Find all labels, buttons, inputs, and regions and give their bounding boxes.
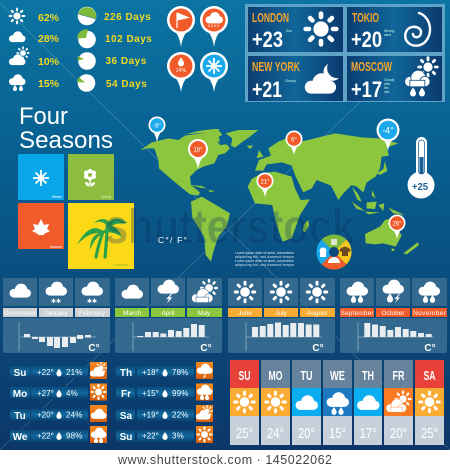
- row: Su: Su: [14, 368, 26, 379]
- Eurasia: [255, 133, 398, 200]
- tile: winter: Winter: [52, 195, 63, 199]
- card: Moscow: rain: [384, 90, 390, 94]
- column: TU: [292, 360, 321, 445]
- label: C/F: C°/ F°: [158, 235, 187, 245]
- season group: autumn months: [340, 278, 447, 354]
- month labels: [3, 308, 110, 317]
- month icons: ✱✱: [51, 298, 61, 305]
- North America: [140, 130, 230, 196]
- card: Moscow: MOSCOW: [351, 59, 392, 74]
- card: Tokio: +20: [351, 27, 382, 52]
- row: Sa: +19°: [142, 410, 159, 420]
- card: Tokio: Strong: [384, 29, 394, 33]
- month labels: December: [4, 310, 37, 317]
- pin: -4: -4°: [382, 126, 394, 136]
- month labels: April: [161, 310, 175, 317]
- tile: autumn: Autumn: [50, 245, 62, 249]
- row: Sa: Sa: [120, 411, 133, 422]
- row: Mo: Mo: [13, 389, 27, 400]
- row: Tu: 24%: [66, 410, 83, 420]
- row: Th: 78%: [172, 368, 189, 377]
- month icons: [10, 282, 103, 305]
- season group: summer months: [228, 278, 335, 354]
- row: Sa: [116, 405, 213, 422]
- card: Tokio: wind: [384, 33, 391, 37]
- card: Tokio: TOKIO: [352, 10, 379, 25]
- thermometer: [408, 137, 434, 198]
- pin: 26: [388, 214, 406, 239]
- row: We: +22°: [37, 432, 54, 440]
- column: WE: WE: [330, 368, 345, 383]
- text block: lorem ipsum: [235, 251, 295, 267]
- row: Su: [10, 362, 107, 379]
- world map: [140, 129, 419, 262]
- South America: [191, 197, 230, 262]
- stats: condition percentages: [9, 9, 60, 91]
- Iceland: [247, 146, 253, 149]
- card: New York: Cloudy: [285, 79, 296, 83]
- row: Tu: [10, 405, 107, 422]
- card: London: +23: [252, 27, 283, 52]
- panel: season tiles: [18, 154, 134, 269]
- month cells: [3, 278, 110, 306]
- icon: sun: [10, 9, 24, 23]
- pin: -4: [376, 118, 400, 151]
- pie 54 days: [76, 74, 95, 92]
- icon: cloud and sun: [9, 47, 29, 65]
- row: Su: 21%: [66, 368, 83, 377]
- pie 226 days: [78, 7, 96, 25]
- column: SU: SU: [238, 368, 250, 383]
- bar chart: C°: [88, 343, 100, 354]
- row: Su: Su: [120, 432, 132, 443]
- text block: lorem ipsum: Lorem ipsum dolor sit amet, consectetur: [235, 251, 295, 255]
- month labels: August: [307, 310, 327, 317]
- pin: snow cloud: [200, 6, 228, 47]
- month cells: [228, 278, 335, 306]
- card: New York: +21: [252, 77, 282, 102]
- title: Seasons: [19, 127, 113, 154]
- month labels: September: [340, 310, 374, 317]
- Japan: [377, 161, 387, 175]
- card: New York: NEW YORK: [252, 59, 300, 74]
- day labels: 54 Days: [106, 79, 147, 90]
- month icons: [235, 282, 327, 302]
- pin: snowflake: [200, 52, 228, 92]
- percent labels: 10%: [38, 56, 60, 68]
- bar chart: C°: [424, 343, 436, 354]
- month icons: [347, 280, 440, 303]
- Southeast Asia: [352, 187, 405, 215]
- row: Fr: +15°: [142, 389, 159, 398]
- row: Mo: +27°: [37, 389, 54, 398]
- card: London: LONDON: [252, 10, 289, 25]
- row: Th: [116, 362, 213, 379]
- title: [19, 103, 113, 154]
- Greenland: [226, 130, 258, 148]
- daily list: right column: [116, 362, 213, 443]
- panel: city forecasts: [245, 4, 445, 102]
- Caribbean: [190, 185, 215, 192]
- row: Th: +18°: [142, 368, 159, 377]
- day labels: 102 Days: [105, 34, 152, 45]
- pin: wind flag: [167, 6, 195, 47]
- stats: day pies: [76, 7, 152, 92]
- month labels: February: [79, 310, 106, 317]
- percent labels: 15%: [38, 78, 60, 90]
- Australia: [365, 218, 402, 247]
- title: Four: [19, 103, 68, 130]
- pin: humidity: 24%: [176, 68, 187, 74]
- icon: cloud: [9, 31, 26, 42]
- card: Moscow: [347, 56, 442, 102]
- pin: 18: [188, 139, 208, 169]
- pin: 26: 26°: [392, 222, 402, 228]
- month labels: [340, 308, 447, 317]
- month labels: [228, 308, 335, 317]
- percent labels: 28%: [38, 33, 60, 45]
- column: SU: 25°: [236, 425, 253, 442]
- column: SU: [230, 360, 259, 445]
- column: FR: [384, 360, 413, 445]
- row: Su: 3%: [172, 432, 184, 440]
- card: London: [248, 7, 343, 52]
- daily list: left column: [10, 362, 107, 443]
- percent labels: [38, 12, 60, 90]
- card: New York: [248, 56, 343, 102]
- pin: 21: [256, 172, 274, 197]
- Arctic islands: [185, 129, 220, 142]
- row: Th: Th: [120, 368, 132, 379]
- weekly forecast: [230, 360, 444, 445]
- pin: 6: 6°: [291, 138, 297, 144]
- text block: lorem ipsum: Lorem ipsum dolor sit amet, consectetur: [235, 259, 295, 263]
- pie 36 days: [78, 52, 96, 70]
- row: We: [10, 426, 107, 443]
- card: Tokio: [347, 7, 442, 52]
- column: TU: 20°: [298, 425, 315, 442]
- footer credit: www.shutterstock.com · 145022062: [117, 453, 332, 467]
- text block: lorem ipsum: adipiscing elit, sed dommod tempor: [235, 255, 295, 259]
- Africa: [248, 172, 310, 242]
- month labels: June: [238, 310, 252, 317]
- month labels: October: [381, 310, 405, 317]
- row: Fr: Fr: [121, 389, 131, 400]
- column: MO: 24°: [267, 425, 284, 442]
- pin: 21: 21°: [260, 180, 270, 186]
- column: WE: [323, 360, 352, 445]
- pin: -8: -8°: [153, 124, 161, 130]
- season group: spring months: [115, 278, 222, 354]
- pin: 18: 18°: [193, 148, 203, 154]
- column: SA: [415, 360, 444, 445]
- month labels: January: [44, 310, 68, 317]
- month labels: November: [413, 310, 447, 317]
- month labels: [115, 308, 222, 317]
- column: MO: MO: [268, 368, 282, 383]
- day labels: 226 Days: [104, 12, 151, 23]
- tile: summer with palm trees: Summer: [113, 262, 129, 267]
- column: FR: FR: [392, 368, 405, 383]
- month labels: July: [275, 310, 288, 317]
- row: Sa: 22%: [172, 410, 189, 420]
- column: TH: [354, 360, 382, 445]
- card: Moscow: with: [384, 82, 390, 86]
- icon: cloud rain: [9, 74, 26, 91]
- map pins: [148, 116, 406, 239]
- card: London: Sun: [286, 29, 292, 33]
- month cells: [340, 278, 447, 306]
- row: Tu: Tu: [14, 411, 26, 422]
- season group: winter months: [3, 278, 110, 354]
- card: Moscow: +17: [351, 77, 382, 102]
- column: FR: 20°: [390, 425, 407, 442]
- bar chart: C°: [200, 343, 212, 354]
- row: Fr: [116, 384, 213, 400]
- row: Fr: 99%: [172, 389, 189, 398]
- column: TU: TU: [300, 368, 312, 383]
- month cells: [115, 278, 222, 306]
- column: MO: [261, 360, 290, 445]
- Madagascar: [303, 220, 309, 232]
- day labels: 36 Days: [106, 56, 147, 67]
- row: We: 98%: [66, 432, 83, 440]
- month icons: [122, 280, 217, 304]
- row: Su: +22°: [37, 368, 54, 377]
- month labels: May: [198, 310, 211, 317]
- watermark: shutterstock: [105, 201, 355, 254]
- British Isles: [257, 150, 263, 158]
- card: Moscow: the: [384, 86, 389, 90]
- row: Su: +22°: [142, 432, 159, 440]
- New Zealand: [392, 242, 419, 254]
- month icons: ✱✱: [87, 298, 97, 305]
- row: Su: [116, 426, 213, 443]
- text block: lorem ipsum: adipiscing elit, sed dommod tempor: [235, 263, 295, 267]
- bar chart: C°: [312, 343, 324, 354]
- row: Mo: [10, 384, 107, 400]
- card: Moscow: Cloudy: [384, 78, 395, 82]
- day labels: [104, 12, 152, 90]
- pie 102 days: [77, 29, 96, 48]
- pin: 6: [286, 130, 302, 155]
- weather pins: [167, 6, 228, 92]
- row: Tu: +20°: [37, 410, 54, 420]
- percent labels: 62%: [38, 12, 60, 24]
- column: SA: 25°: [421, 425, 438, 442]
- pin: -8: [148, 116, 166, 142]
- column: TH: TH: [362, 368, 374, 383]
- thermometer: +25: [412, 182, 428, 193]
- column: TH: 17°: [360, 425, 376, 442]
- row: We: We: [13, 432, 28, 443]
- row: Mo: 4%: [66, 389, 78, 398]
- column: SA: SA: [424, 368, 436, 383]
- tile: spring: Spring: [101, 195, 111, 199]
- clothing wheel: [316, 234, 352, 270]
- month labels: March: [123, 310, 141, 317]
- column: WE: 15°: [329, 425, 346, 442]
